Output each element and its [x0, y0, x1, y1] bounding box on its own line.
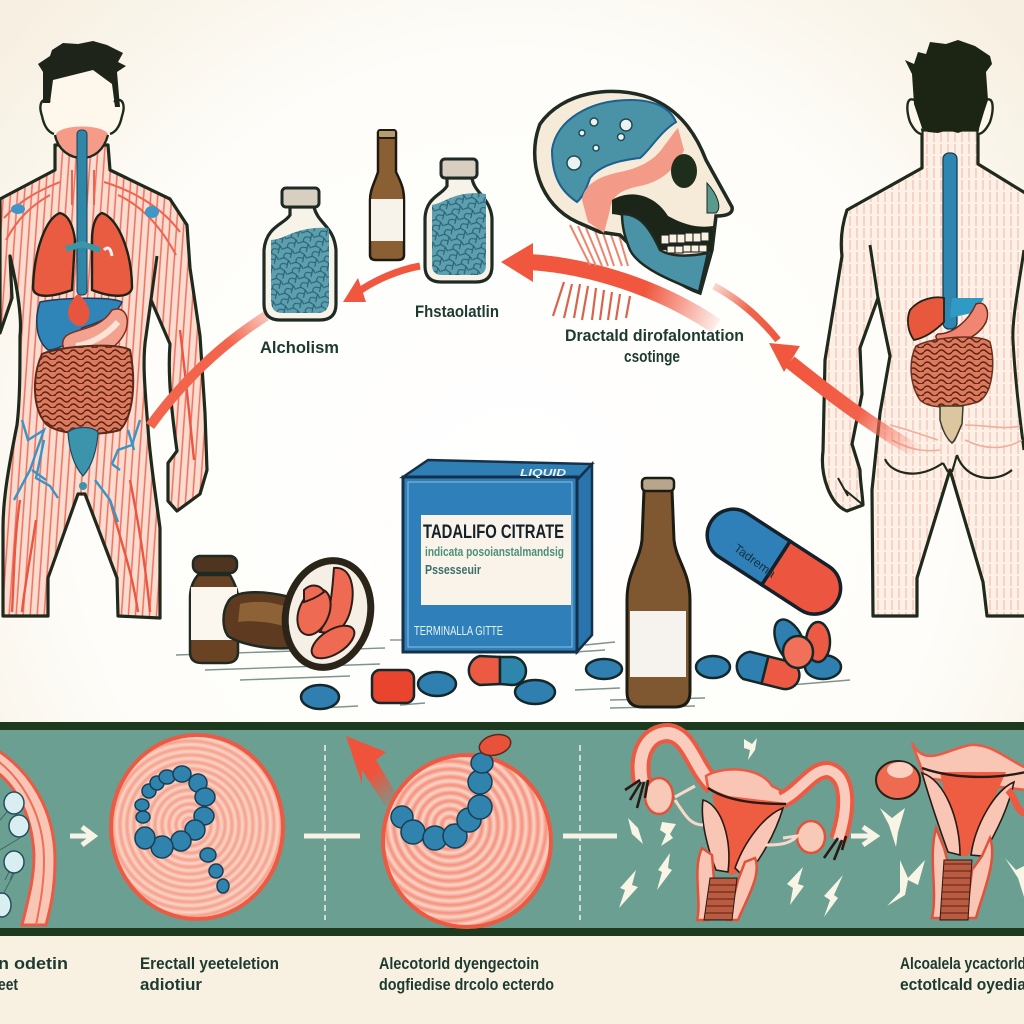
panel: right figure, back view anatomy — [822, 40, 1024, 616]
fundus dark line — [922, 768, 1024, 777]
shoulder patches — [11, 204, 159, 218]
armpit crease — [870, 245, 878, 298]
fundus dark line — [708, 788, 786, 804]
capsule heap — [768, 615, 830, 669]
brain vesicles — [567, 118, 632, 170]
vaginal canal — [704, 878, 737, 920]
label: Alcholism: Alcholism — [260, 338, 339, 357]
uterine body — [712, 794, 787, 876]
left cervix flank — [697, 848, 714, 920]
ringed disc — [383, 755, 551, 927]
appendix — [940, 406, 963, 443]
vessel wall — [0, 748, 55, 925]
caption: second column: Erectall yeeteletion — [140, 954, 279, 973]
pink brain band — [582, 128, 684, 233]
blood cells — [0, 792, 29, 917]
inner frame — [408, 482, 572, 647]
fundus — [912, 743, 1024, 790]
arrow: jar to jar — [343, 266, 420, 302]
bottom border — [0, 928, 1024, 936]
intestines — [35, 346, 133, 434]
product name: TADALIFO CITRATE — [423, 522, 564, 543]
step 4: uterus with ovaries — [625, 733, 846, 920]
heart — [68, 294, 90, 326]
tipped bottle body — [224, 592, 290, 648]
caption: third column: Alecotorld dyengectoin — [379, 954, 539, 973]
lightning sparks — [619, 738, 1024, 917]
right arm crease — [1013, 250, 1024, 450]
secondary line: Pssesseuir — [425, 562, 481, 577]
caption: fourth column — [900, 954, 1024, 994]
right ovary — [797, 821, 825, 853]
medicine box — [403, 460, 592, 652]
box footer text: TERMINALLA GITTE — [414, 623, 503, 638]
step 2: circle with beads — [111, 735, 283, 919]
red arrow pointing up-left — [346, 736, 400, 806]
liver, blue — [37, 298, 122, 350]
body silhouette — [0, 145, 207, 618]
head outline — [535, 91, 732, 293]
jaw line — [55, 135, 108, 158]
white label — [421, 515, 571, 605]
side tube — [1008, 790, 1024, 815]
ovary highlight — [887, 762, 913, 778]
stomach highlight — [76, 322, 118, 346]
bead chain — [135, 766, 229, 893]
lower jaw, blue — [622, 214, 708, 292]
divider 1 — [304, 745, 360, 920]
red capsules in rim — [291, 568, 360, 665]
box side — [577, 464, 592, 652]
loose pills — [301, 655, 841, 709]
lower neck tendons — [553, 282, 630, 320]
cell network — [0, 804, 20, 900]
hand fingers — [838, 478, 862, 504]
left lung — [33, 213, 75, 296]
right lung — [92, 213, 132, 296]
small bottle — [190, 556, 238, 663]
caption: third column — [379, 954, 554, 994]
small capsule horizontal — [469, 656, 526, 685]
panel: teal process band — [0, 722, 1024, 936]
teeth — [661, 232, 709, 253]
caption: third column: dogfiedise drcolo ecterdo — [379, 975, 554, 994]
bottom strip background — [0, 936, 1024, 1024]
face — [50, 72, 114, 158]
veins in thighs — [14, 420, 140, 522]
tipped bottle rim — [274, 551, 382, 677]
nasal cavity — [707, 183, 719, 213]
label: Dractald dirofalontation: Dractald dirofalontation — [565, 326, 744, 345]
band background — [0, 725, 1024, 931]
tipped bottle neck highlight — [238, 602, 284, 626]
right tube — [782, 770, 845, 840]
stomach — [63, 309, 127, 359]
hair — [38, 41, 126, 107]
skull and brain cross-section — [535, 91, 732, 320]
left ear — [40, 100, 54, 134]
arrow: right figure to skull — [769, 343, 918, 452]
left tube — [641, 733, 714, 786]
large blue and red capsule — [697, 499, 851, 624]
eye socket — [671, 154, 697, 188]
blue organ — [950, 298, 984, 318]
panel: left figure, front view anatomy — [0, 41, 207, 618]
panel: medication still life — [176, 460, 851, 709]
top label text: LIQUID — [520, 468, 566, 479]
step 3: disc with bead tail — [383, 731, 551, 927]
trachea, blue tube — [66, 130, 112, 295]
arrow: step 4 to 5 — [851, 827, 876, 845]
intestines — [911, 337, 993, 407]
vaginal canal — [940, 860, 972, 920]
jaw opening — [612, 194, 713, 252]
caption: second column: adiotiur — [140, 975, 202, 994]
right ear — [110, 100, 124, 134]
label: Fhstaolatlin: Fhstaolatlin — [415, 302, 499, 321]
capsule inscription: Tadrema — [731, 541, 779, 581]
step 1: vessel with cells — [0, 748, 55, 925]
right ear — [978, 99, 993, 134]
armpit crease — [151, 256, 157, 300]
ovary — [876, 761, 920, 799]
product description: indicata posoianstalmandsig — [425, 544, 564, 559]
arrow: skull to jar — [501, 243, 716, 326]
liver — [908, 297, 944, 340]
caption: second column — [140, 954, 279, 994]
arrow: step 1 to 2 — [70, 827, 94, 845]
jar 1 — [264, 188, 336, 320]
top border — [0, 722, 1024, 730]
ringed disc — [111, 735, 283, 919]
left cervix flank — [932, 828, 950, 918]
left ear — [907, 99, 922, 134]
back silhouette — [822, 130, 1024, 616]
box front — [403, 477, 577, 652]
upper neck tendons — [570, 225, 628, 266]
vessel stripes — [0, 758, 44, 925]
caption: first column — [0, 954, 68, 994]
small beer bottle — [370, 130, 404, 260]
buttock curves — [885, 455, 1012, 478]
ligaments — [675, 786, 797, 845]
bladder, lower blue organ — [68, 428, 98, 476]
bead tail — [391, 753, 493, 850]
right cervix flank — [728, 858, 757, 920]
jar 2 — [425, 159, 492, 282]
hair — [905, 40, 992, 133]
neck blush — [56, 126, 108, 157]
table shadow lines — [176, 640, 850, 708]
box top — [403, 460, 592, 480]
left uterine wall — [702, 800, 729, 872]
right uterine wall — [971, 782, 1014, 856]
arrow: left figure to jar — [150, 316, 266, 426]
spine — [943, 153, 957, 329]
left uterine wall — [922, 773, 960, 855]
fimbriae — [625, 780, 846, 860]
fundus — [706, 769, 792, 806]
brain, blue — [552, 100, 676, 202]
step 5: uterus close-up — [876, 743, 1024, 920]
stomach — [936, 303, 988, 343]
hip muscle arcs — [890, 425, 1022, 451]
uterine body — [940, 772, 1006, 856]
left tube inner — [641, 733, 714, 786]
arrow: skull to right figure stub — [714, 286, 778, 340]
red drop — [477, 731, 513, 759]
leg muscle strokes — [12, 330, 194, 612]
right uterine wall — [735, 808, 783, 878]
small capsule tilted — [734, 649, 802, 692]
main beer bottle — [627, 478, 690, 707]
divider 2 — [563, 745, 617, 920]
right cervix flank — [966, 838, 992, 918]
shoulder muscle strokes — [4, 170, 180, 255]
label: csotinge: csotinge — [624, 347, 680, 366]
right tube inner — [782, 770, 845, 840]
blue dot — [79, 482, 87, 490]
left ovary — [645, 778, 673, 814]
